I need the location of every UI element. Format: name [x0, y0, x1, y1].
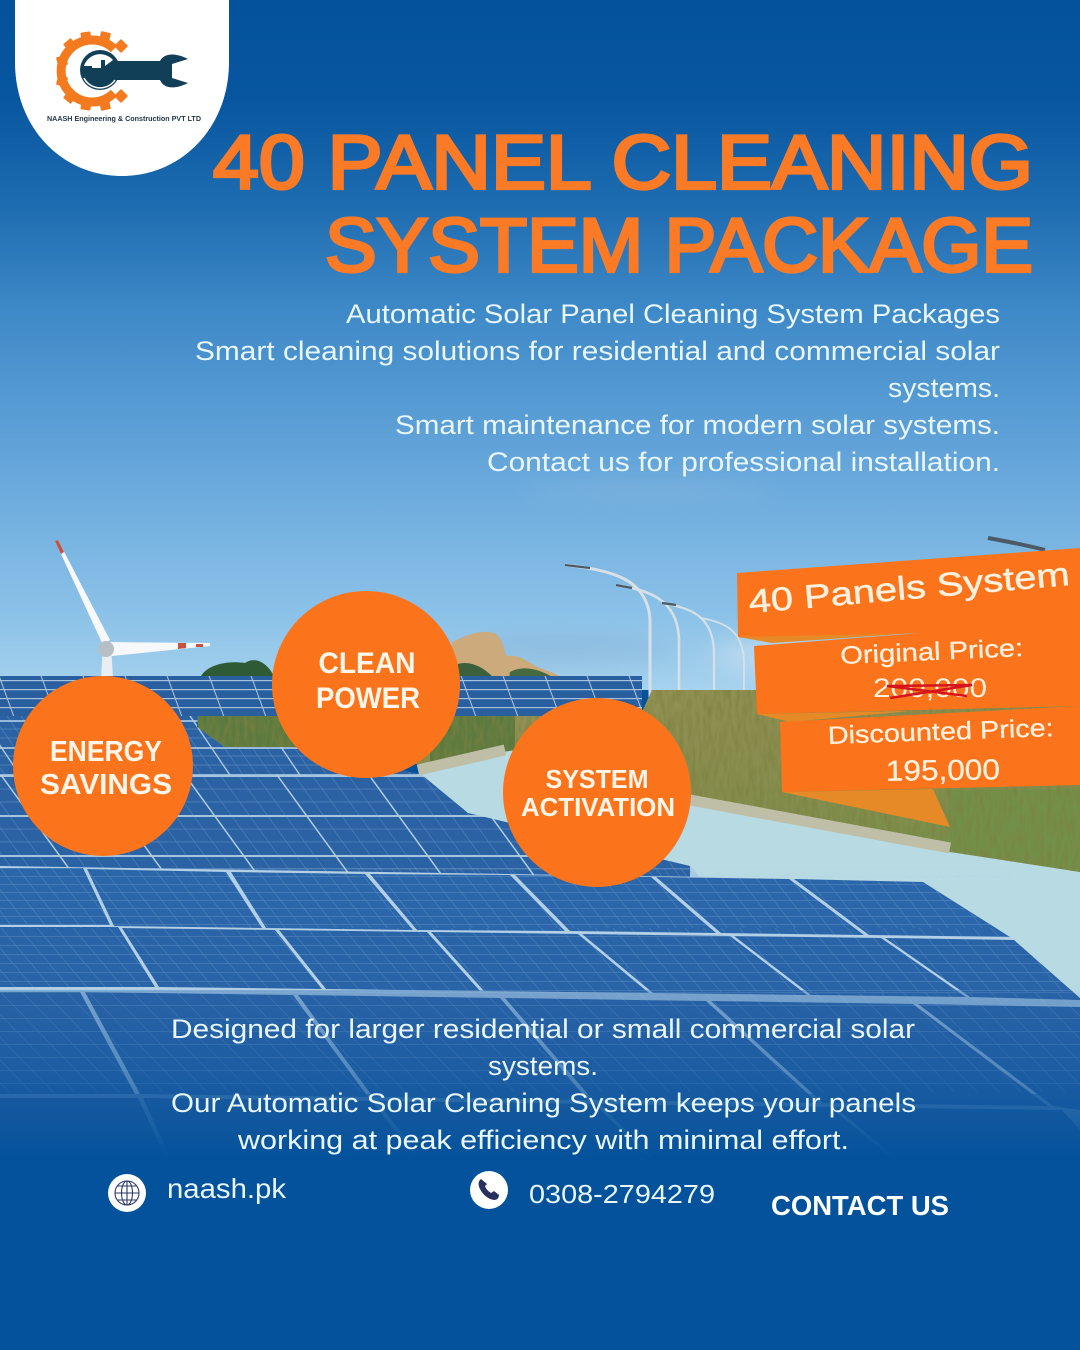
- bottom text block: Our Automatic Solar Cleaning System keeps your panels: [171, 1088, 916, 1118]
- near panel rows: [0, 866, 1080, 1190]
- concrete path: [415, 745, 1080, 1010]
- original price label: Original Price:: [840, 634, 1024, 670]
- wrench: [115, 55, 188, 87]
- bottom text block: working at peak efficiency with minimal effort.: [237, 1125, 849, 1155]
- intro text block: systems.: [888, 373, 1000, 403]
- badge: system activation: ACTIVATION: [521, 792, 675, 822]
- title: SYSTEM PACKAGE: [325, 204, 1033, 288]
- company name: NAASH Engineering & Construction PVT LTD: [47, 114, 201, 123]
- logo badge: [15, 0, 229, 176]
- price ribbon: [737, 548, 1080, 827]
- intro text block: Contact us for professional installation.: [487, 447, 1000, 477]
- street lamps: [565, 538, 1045, 712]
- badge: energy savings: ENERGY: [50, 736, 162, 768]
- ribbon bands: [737, 548, 1080, 637]
- badge: system activation: [503, 698, 691, 887]
- bottom text block: [171, 1014, 916, 1155]
- ribbon folds: [738, 630, 960, 643]
- fade to brand blue: [0, 985, 1080, 1160]
- icon: globe: [108, 1174, 146, 1212]
- contact: phone: [470, 1171, 715, 1209]
- gear teeth: [56, 31, 128, 111]
- contact: website: [108, 1173, 287, 1212]
- icon: gear and wrench: [56, 31, 188, 111]
- badge: clean power: POWER: [316, 682, 420, 715]
- original price struck out: 200,000: [873, 673, 987, 703]
- badge: clean power: CLEAN: [318, 647, 416, 680]
- badge: system activation: SYSTEM: [546, 764, 648, 794]
- title: 40 PANEL CLEANING: [213, 120, 1033, 206]
- discounted price: 195,000: [886, 754, 1000, 788]
- badge: energy savings: SAVINGS: [40, 769, 172, 801]
- icon: phone: [470, 1171, 508, 1209]
- discounted price label: Discounted Price:: [827, 714, 1054, 750]
- contact: phone: 0308-2794279: [529, 1179, 715, 1209]
- title: [213, 120, 1033, 288]
- solar panel field: [0, 676, 1080, 1350]
- icon: wind turbine: [55, 540, 210, 678]
- kerb: [418, 750, 950, 848]
- contact us label: CONTACT US: [771, 1190, 949, 1221]
- far panel rows: [0, 676, 702, 880]
- grass: [198, 690, 1080, 872]
- photo: landscape with turbine, rocks and lamps: [55, 538, 1080, 1010]
- rocks and trees: [200, 632, 570, 684]
- gear ring: [61, 40, 114, 102]
- intro text block: Automatic Solar Panel Cleaning System Packages: [346, 299, 1000, 329]
- intro text block: Smart maintenance for modern solar systems.: [395, 410, 1000, 440]
- intro text block: [195, 299, 1000, 477]
- ribbon tail: [782, 789, 950, 827]
- badge: clean power: [272, 591, 460, 778]
- mask: right of the near panels: [923, 881, 1080, 998]
- bottom text block: systems.: [488, 1051, 598, 1081]
- badge: energy savings: [13, 676, 193, 856]
- contact: website: naash.pk: [167, 1173, 287, 1204]
- ribbon heading: 40 Panels System: [747, 555, 1071, 620]
- bottom text block: Designed for larger residential or small commercial solar: [171, 1014, 915, 1044]
- intro text block: Smart cleaning solutions for residential and commercial solar: [195, 336, 1000, 366]
